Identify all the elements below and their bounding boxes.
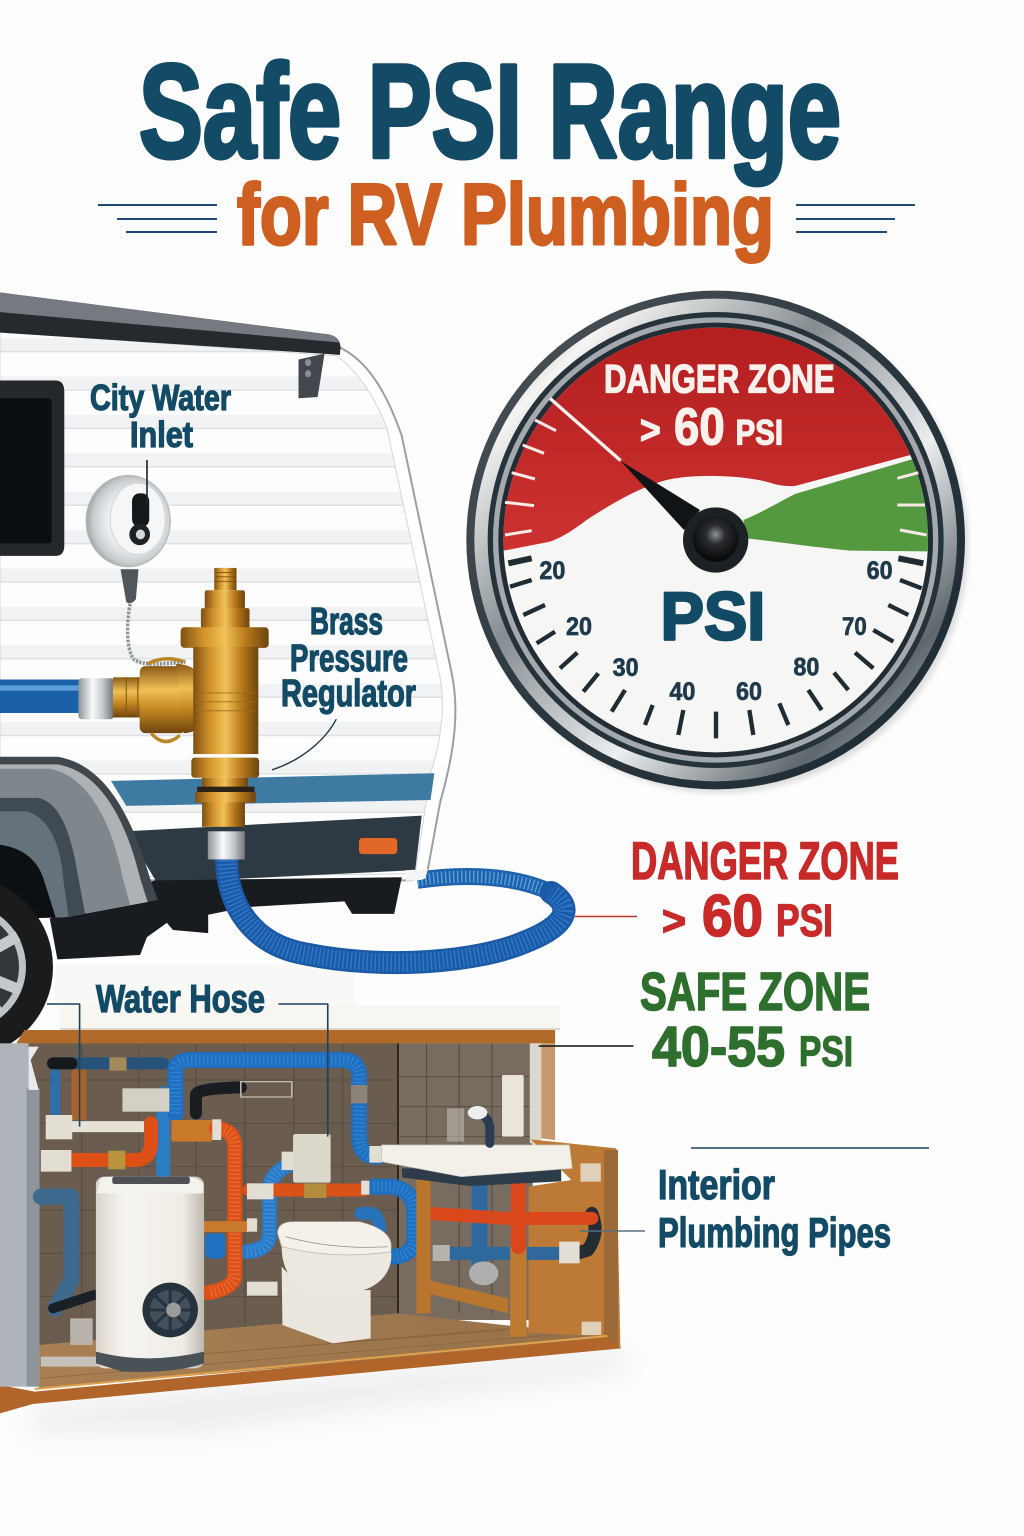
water hose rear section (417, 876, 551, 892)
label: city water inlet: Inlet (130, 414, 193, 455)
danger zone text: 60 (674, 398, 725, 456)
leader lines (47, 1004, 633, 1137)
floor (39, 1313, 608, 1388)
danger zone callout (575, 832, 899, 949)
coiled water hose (227, 856, 564, 963)
RV corner skirt (406, 869, 428, 881)
title (139, 38, 841, 263)
wood strip (71, 1062, 86, 1120)
junction box (293, 1134, 331, 1183)
dial numbers: 60 (867, 557, 893, 585)
gauge shadow (472, 297, 968, 793)
dial numbers (539, 557, 893, 706)
danger zone text: DANGER ZONE (604, 358, 835, 402)
bezel (466, 291, 965, 789)
label: water hose: Water Hose (96, 978, 265, 1021)
outlet ferrule (208, 831, 245, 859)
label: brass pressure regulator: Regulator (281, 673, 416, 715)
label: interior plumbing pipes: Plumbing Pipes (658, 1209, 891, 1256)
chassis (50, 877, 402, 959)
awning rail (0, 292, 341, 398)
dial numbers: 60 (736, 678, 762, 706)
PSI label: PSI (661, 578, 765, 654)
RV body shell (0, 331, 455, 880)
right corner trim (530, 1043, 541, 1143)
orange pipes (71, 1120, 592, 1337)
wheel (0, 877, 53, 1057)
dial numbers: 80 (793, 653, 819, 681)
back wall right (398, 1043, 533, 1320)
label: brass pressure regulator (281, 601, 416, 715)
safe zone callout (640, 962, 870, 1079)
interior plumbing cutaway (0, 1004, 633, 1413)
safe zone callout: 40-55 (652, 1015, 785, 1079)
danger zone callout: 60 (702, 883, 763, 949)
safe zone callout: PSI (799, 1028, 853, 1076)
safe zone callout: SAFE ZONE (640, 962, 870, 1022)
wheel arch fender (0, 757, 165, 923)
danger zone callout: > (662, 897, 686, 944)
label: interior plumbing pipes: Interior (658, 1161, 775, 1208)
title line 2: for RV Plumbing (237, 167, 774, 263)
danger zone callout: DANGER ZONE (631, 832, 899, 891)
cutaway floor shadow (30, 1350, 630, 1432)
sink (382, 1075, 572, 1285)
brass pressure regulator (113, 568, 269, 827)
label: brass pressure regulator: Pressure (290, 638, 408, 680)
dial numbers: 70 (842, 613, 867, 641)
wood ceiling beam (16, 1030, 555, 1043)
blue pipes (41, 1057, 595, 1308)
gauge ticks (508, 558, 923, 738)
danger zone text (604, 358, 835, 456)
label: brass pressure regulator: Brass (310, 601, 383, 643)
siding (0, 331, 442, 878)
RV exterior (0, 292, 564, 1057)
dial numbers: 40 (669, 678, 695, 706)
inlet hose (0, 678, 114, 719)
wood base (0, 1337, 621, 1413)
sink wood frame (416, 1180, 508, 1313)
dial numbers: 20 (539, 557, 565, 585)
dial numbers: 30 (613, 654, 639, 682)
left metal column (0, 1043, 40, 1387)
water heater (96, 1177, 204, 1372)
needle (550, 398, 748, 573)
regulator leader line (272, 720, 336, 770)
danger zone text: PSI (736, 413, 783, 452)
label: city water inlet (90, 377, 231, 505)
lower body stripes (111, 773, 434, 883)
dial face (503, 328, 928, 752)
label: city water inlet: City Water (90, 377, 231, 418)
safe arc (743, 459, 928, 552)
danger zone text: > (640, 408, 661, 452)
back wall left (24, 1030, 400, 1347)
pressure gauge (466, 280, 968, 793)
danger zone callout: PSI (776, 895, 833, 946)
window (0, 380, 64, 556)
fittings (41, 1088, 580, 1367)
city water inlet (86, 476, 186, 664)
dial numbers: 20 (566, 613, 592, 641)
danger arc (503, 328, 910, 551)
label: interior plumbing pipes (580, 1148, 929, 1256)
right wood cabinet (529, 1139, 620, 1348)
toilet (278, 1222, 391, 1343)
counter band (55, 965, 560, 1029)
